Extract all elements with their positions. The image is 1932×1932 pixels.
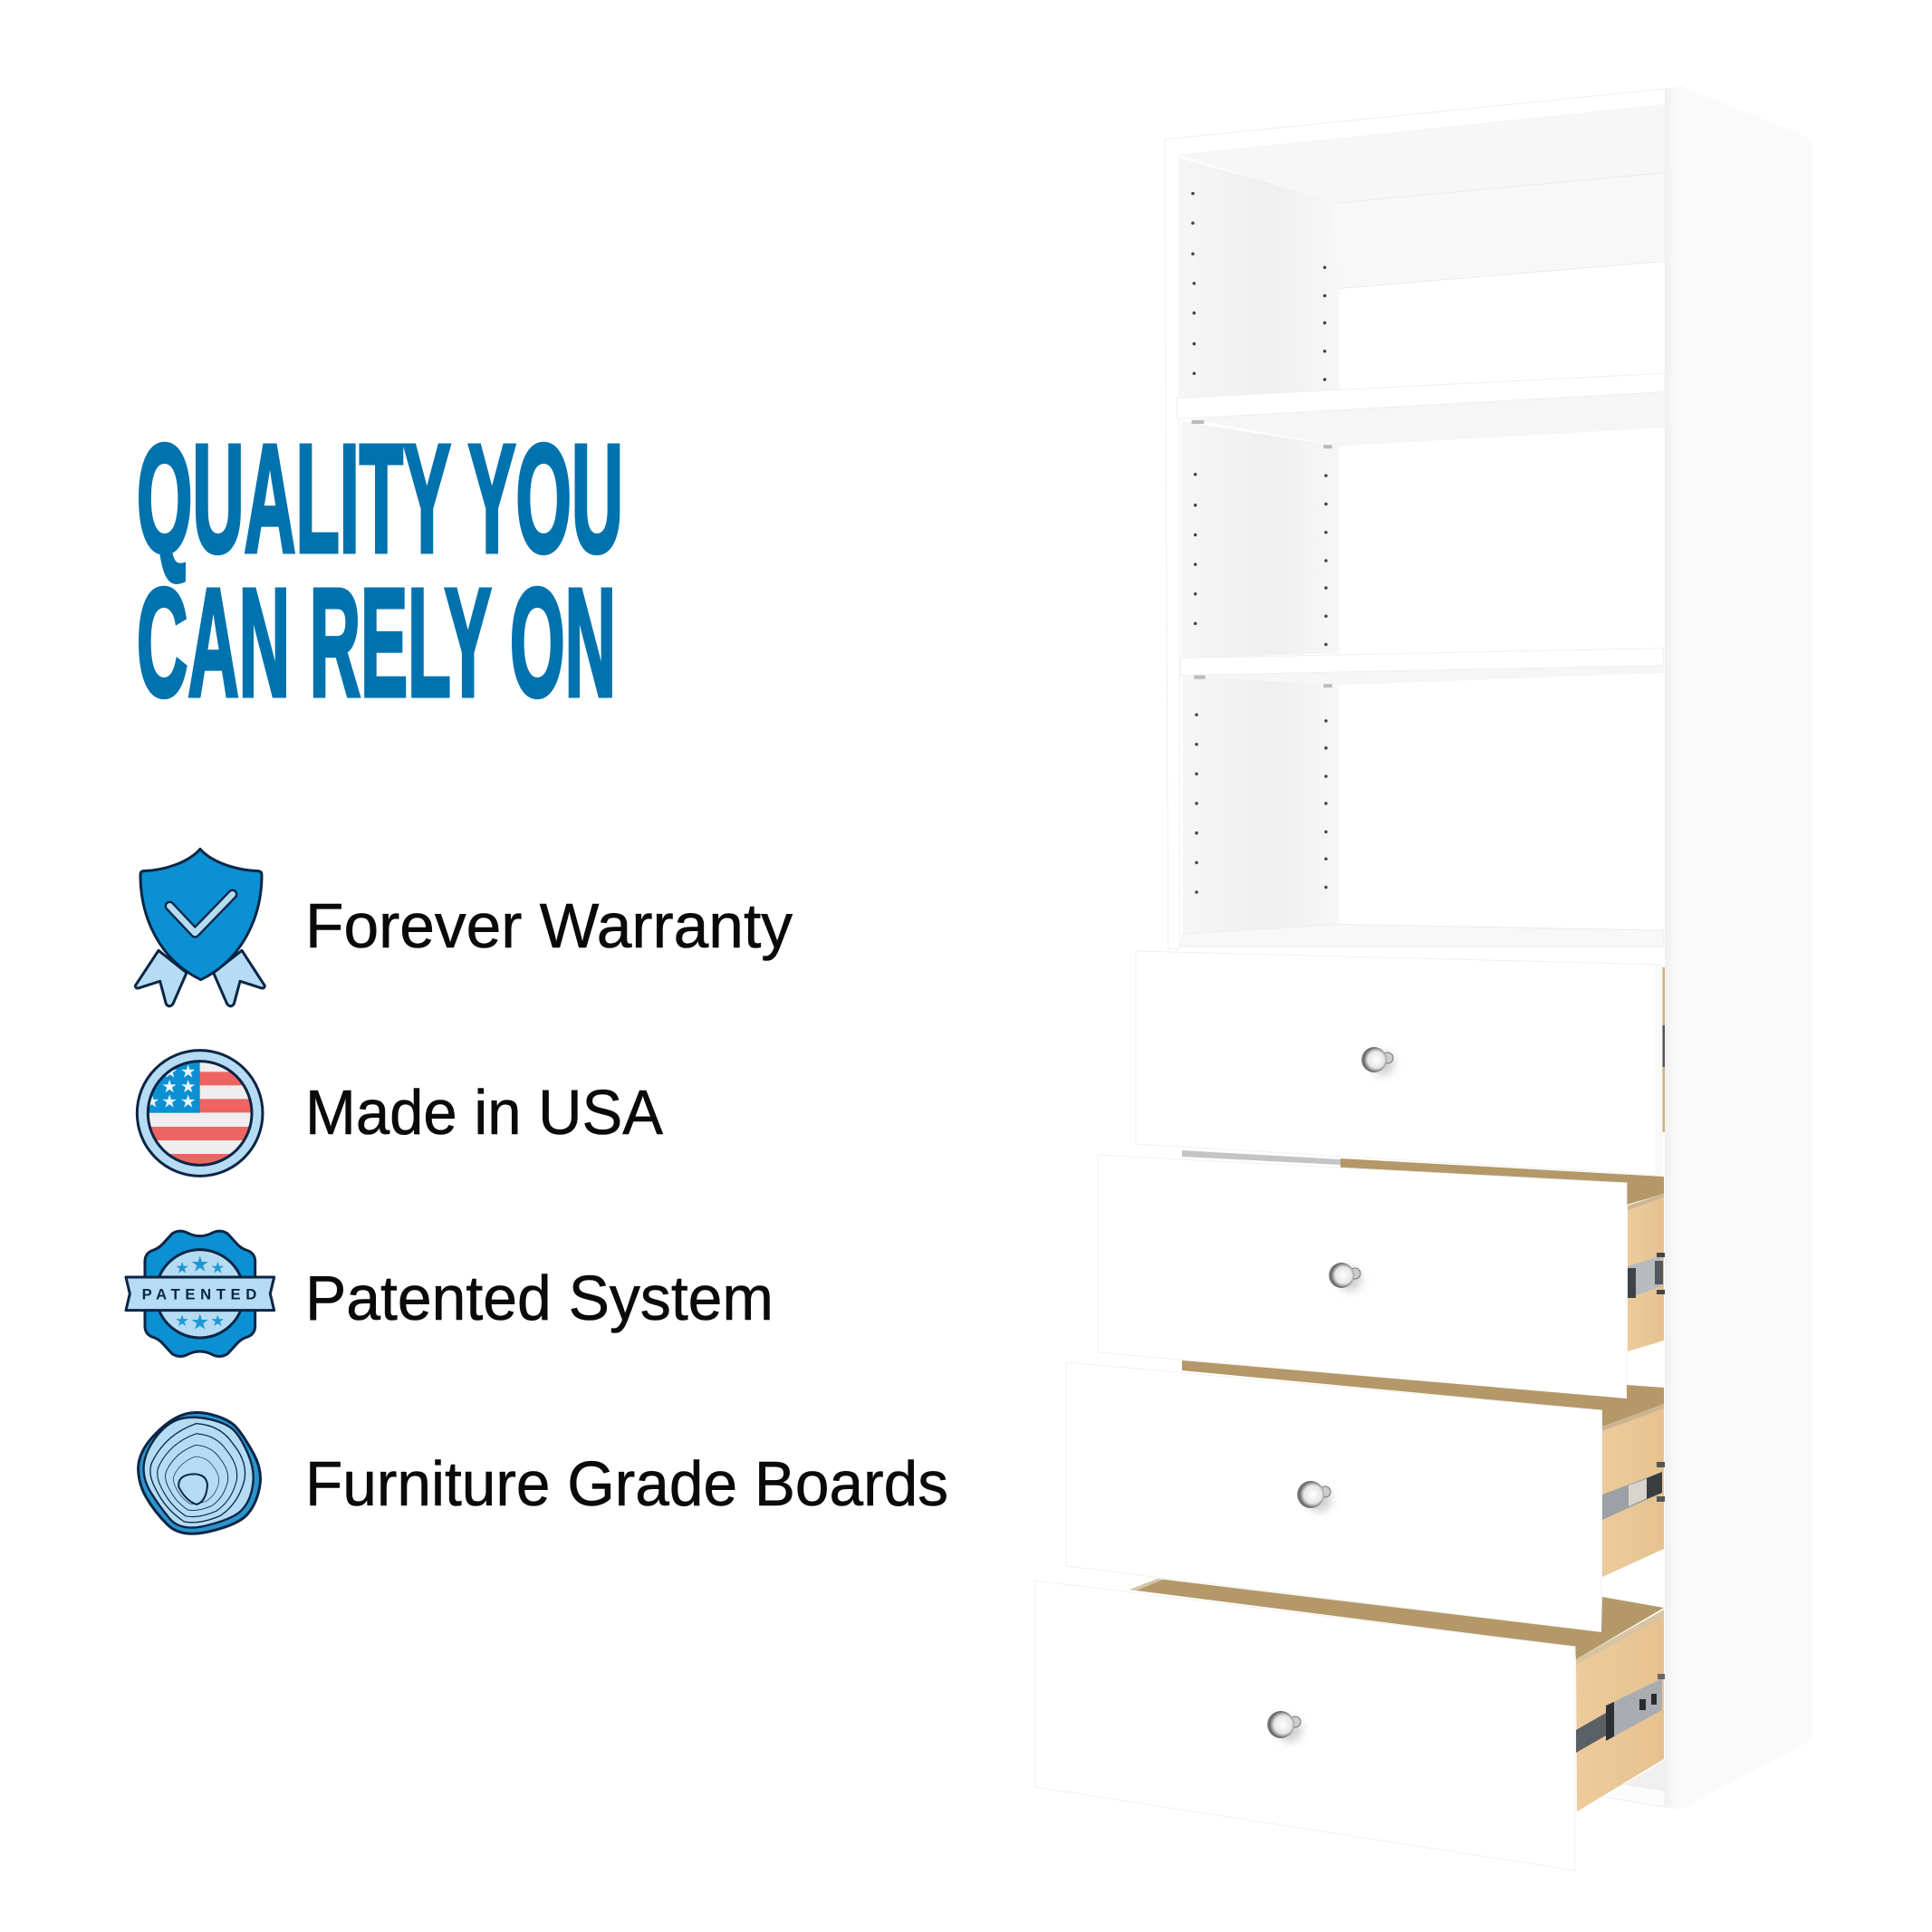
icon: patented seal: ★: [190, 1310, 209, 1333]
interior: [1129, 1579, 1664, 1659]
upper shelf: [1177, 373, 1665, 448]
title: Quality You Can Rely On: [137, 413, 623, 729]
cabinet interior top and rail: [1179, 105, 1666, 288]
icon: patented seal: ★: [175, 1312, 189, 1330]
cabinet side panel: [1680, 86, 1812, 1810]
icon: American flag badge: ★: [180, 1093, 196, 1112]
label: Furniture Grade Boards: Furniture Grade Boards: [305, 1448, 948, 1519]
bottom shelf: [1180, 924, 1664, 947]
icon: American flag badge: ★: [144, 1093, 159, 1112]
icon: wood rings: [139, 1413, 260, 1533]
drawer 2: [1098, 1150, 1665, 1399]
cabinet right front stile: [1665, 86, 1682, 1810]
cabinet floor below drawers: [1594, 1760, 1665, 1807]
middle shelf: [1180, 649, 1664, 687]
icon: American flag badge: ★: [180, 1062, 196, 1081]
text: CAN RELY ON: [137, 557, 616, 729]
metal slide: [1628, 1253, 1665, 1298]
cabinet front frame: [1165, 89, 1666, 949]
label: Forever Warranty: Forever Warranty: [305, 890, 793, 961]
label: Patented System: Patented System: [305, 1263, 774, 1333]
left inner wall: [1179, 158, 1340, 934]
icon: patented seal: ★: [211, 1312, 225, 1330]
text: QUALITY YOU: [137, 413, 623, 585]
icon: patented seal: ★: [190, 1252, 209, 1275]
icon: patented seal: ★: [175, 1258, 189, 1276]
knob: [1267, 1711, 1302, 1742]
drawer 4: [1035, 1579, 1665, 1870]
shelving tower with drawers: [1035, 86, 1812, 1870]
icon: American flag badge: ★: [161, 1093, 178, 1112]
drawer 2 front: [1098, 1155, 1627, 1399]
wood side: [1628, 1196, 1664, 1351]
cabinet upper section: [1165, 89, 1666, 949]
wood side: [1602, 1408, 1664, 1577]
label: Made in USA: Made in USA: [305, 1077, 663, 1148]
interior: [1341, 1158, 1664, 1205]
icon: American flag badge: ★: [180, 1078, 196, 1097]
drawer 1 front: [1136, 951, 1662, 1176]
wood and slide sliver: [1657, 967, 1665, 1132]
wood side: [1576, 1617, 1664, 1812]
icon: American flag badge: ★: [162, 1062, 178, 1081]
metal slide: [1602, 1462, 1665, 1520]
icon: patented seal: ★: [211, 1258, 225, 1276]
icon: American flag badge: [137, 1051, 263, 1176]
knob: [1297, 1481, 1331, 1512]
drawer 1: [1136, 951, 1665, 1176]
icon: patented seal: [126, 1231, 274, 1357]
icon: patented seal: PATENTED: [142, 1285, 256, 1302]
drawer 4 front: [1035, 1581, 1575, 1870]
metal slide: [1576, 1674, 1665, 1753]
knob: [1361, 1047, 1394, 1075]
drawer 3 front: [1066, 1362, 1601, 1632]
interior: [1182, 1360, 1664, 1427]
icon: warranty shield with ribbons: [135, 849, 264, 1006]
shelf peg holes: [1191, 192, 1328, 894]
drawer 3: [1066, 1360, 1665, 1632]
knob: [1329, 1263, 1361, 1291]
slide channel: [1182, 1150, 1341, 1165]
icon: American flag badge: ★: [161, 1078, 178, 1097]
